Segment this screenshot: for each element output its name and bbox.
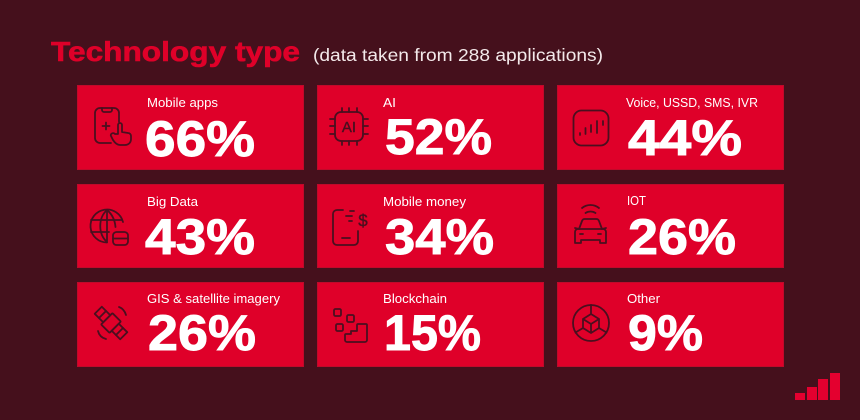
icon: mobile money: $ bbox=[358, 211, 368, 230]
value: 34% bbox=[385, 209, 494, 265]
icon: AI chip: AI bbox=[342, 119, 356, 136]
label: IOT bbox=[627, 194, 646, 208]
panel: GIS bbox=[78, 282, 304, 366]
icon: cube in circle bbox=[573, 305, 609, 341]
value: 66% bbox=[145, 111, 255, 167]
label: AI bbox=[383, 96, 396, 110]
icon: satellite bbox=[93, 305, 129, 341]
value: 26% bbox=[628, 209, 736, 265]
icon: blockchain blocks bbox=[334, 309, 367, 342]
panel: blockchain bbox=[318, 282, 544, 366]
panel: IOT bbox=[558, 184, 784, 268]
icon: mobile apps bbox=[95, 108, 131, 145]
panel: AI bbox=[318, 86, 544, 170]
icon: mobile money bbox=[333, 210, 368, 245]
panel: mobile money bbox=[318, 184, 544, 268]
icon: globe with database bbox=[90, 210, 128, 245]
label: Mobile money bbox=[383, 195, 467, 209]
value: 26% bbox=[148, 305, 256, 361]
panel: voice bbox=[558, 86, 784, 170]
value: 9% bbox=[628, 305, 703, 361]
value: 44% bbox=[628, 110, 742, 166]
label: Blockchain bbox=[383, 292, 447, 306]
value: 43% bbox=[145, 209, 255, 265]
logo: rising bars bbox=[795, 373, 840, 400]
label: Other bbox=[627, 292, 660, 306]
subtitle: (data taken from 288 applications) bbox=[313, 45, 603, 65]
panel: big data bbox=[78, 184, 304, 268]
icon: voice signal bbox=[574, 110, 608, 146]
label: GIS & satellite imagery bbox=[147, 292, 281, 306]
panel: other bbox=[558, 282, 784, 366]
label: Voice, USSD, SMS, IVR bbox=[626, 96, 758, 110]
value: 15% bbox=[384, 305, 481, 361]
label: Big Data bbox=[147, 195, 198, 209]
value: 52% bbox=[385, 109, 492, 165]
icon: AI chip bbox=[330, 108, 368, 145]
title: Technology type bbox=[51, 36, 300, 67]
label: Mobile apps bbox=[147, 96, 218, 110]
icon: connected car bbox=[575, 205, 606, 243]
panel: mobile apps bbox=[78, 86, 304, 170]
